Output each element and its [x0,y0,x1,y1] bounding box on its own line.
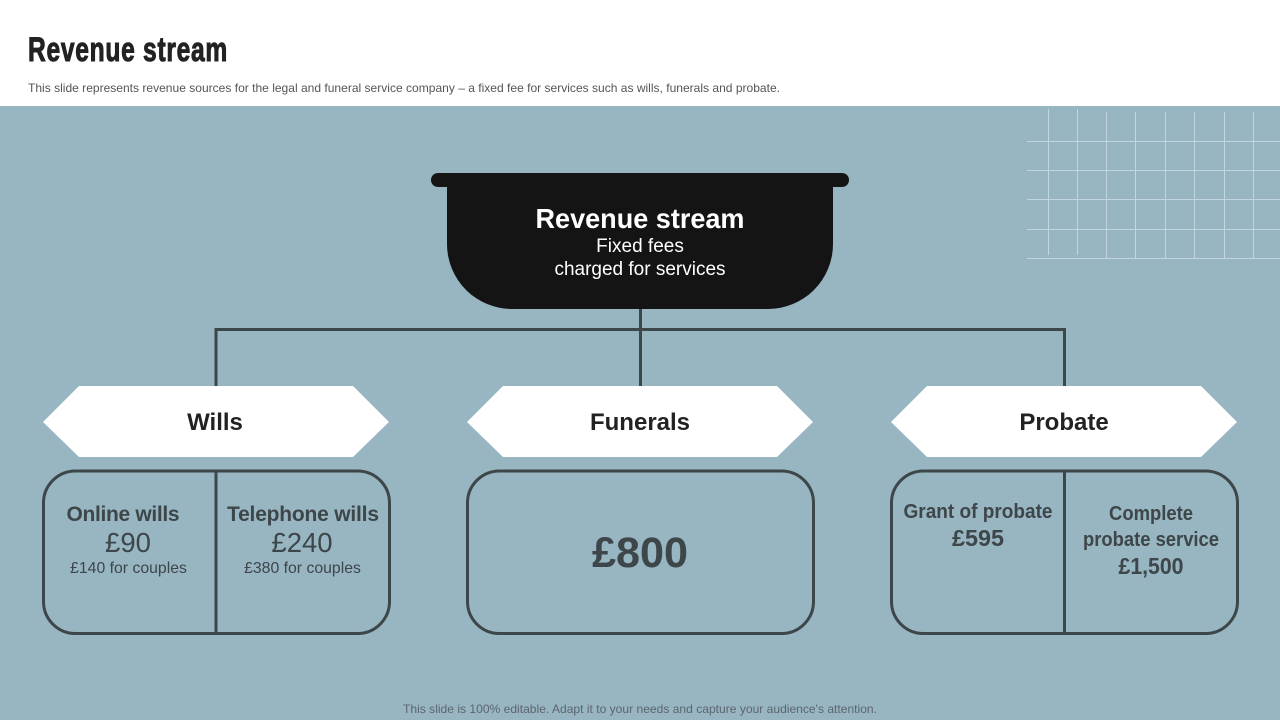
grant of probate [904,501,1052,551]
complete probate service: probate service [1083,529,1219,551]
telephone wills: £380 for couples [244,560,361,577]
subtitle: This slide represents revenue sources for the legal and funeral service company – a fixed fee for services such as wills, funerals and probate. [28,81,780,95]
online wills: £140 for couples [70,560,187,577]
telephone wills: £240 [271,527,333,558]
online wills: Online wills [66,503,180,526]
online wills: £90 [105,527,151,558]
wills box [44,471,390,634]
telephone wills: Telephone wills [227,503,379,526]
online wills [66,503,187,577]
grant of probate: £595 [952,525,1004,551]
panel: funerals [467,386,814,634]
funerals heading: Funerals [590,409,690,436]
footer note: This slide is 100% editable. Adapt it to your needs and capture your audience's attention. [403,702,877,716]
probate box [892,471,1238,634]
funerals box [468,471,814,634]
wills heading [43,386,389,457]
probate heading [891,386,1237,457]
complete probate service: £1,500 [1118,553,1184,579]
wills heading: Wills [187,409,243,436]
pot description: charged for services [554,259,726,280]
probate heading: Probate [1019,409,1109,436]
title: Revenue stream [28,31,228,69]
pot description: Fixed fees [596,236,684,257]
funerals price: £800 [592,529,688,577]
panel: probate [891,386,1238,634]
pot description [554,236,726,280]
telephone wills [227,503,379,577]
pot heading: Revenue stream [536,203,744,234]
panel: wills [43,386,390,634]
funerals heading [467,386,813,457]
complete probate service [1083,503,1219,579]
grant of probate: Grant of probate [904,501,1052,523]
connector lines [216,309,1064,386]
complete probate service: Complete [1109,503,1193,525]
panel: revenue stream pot [431,173,849,309]
